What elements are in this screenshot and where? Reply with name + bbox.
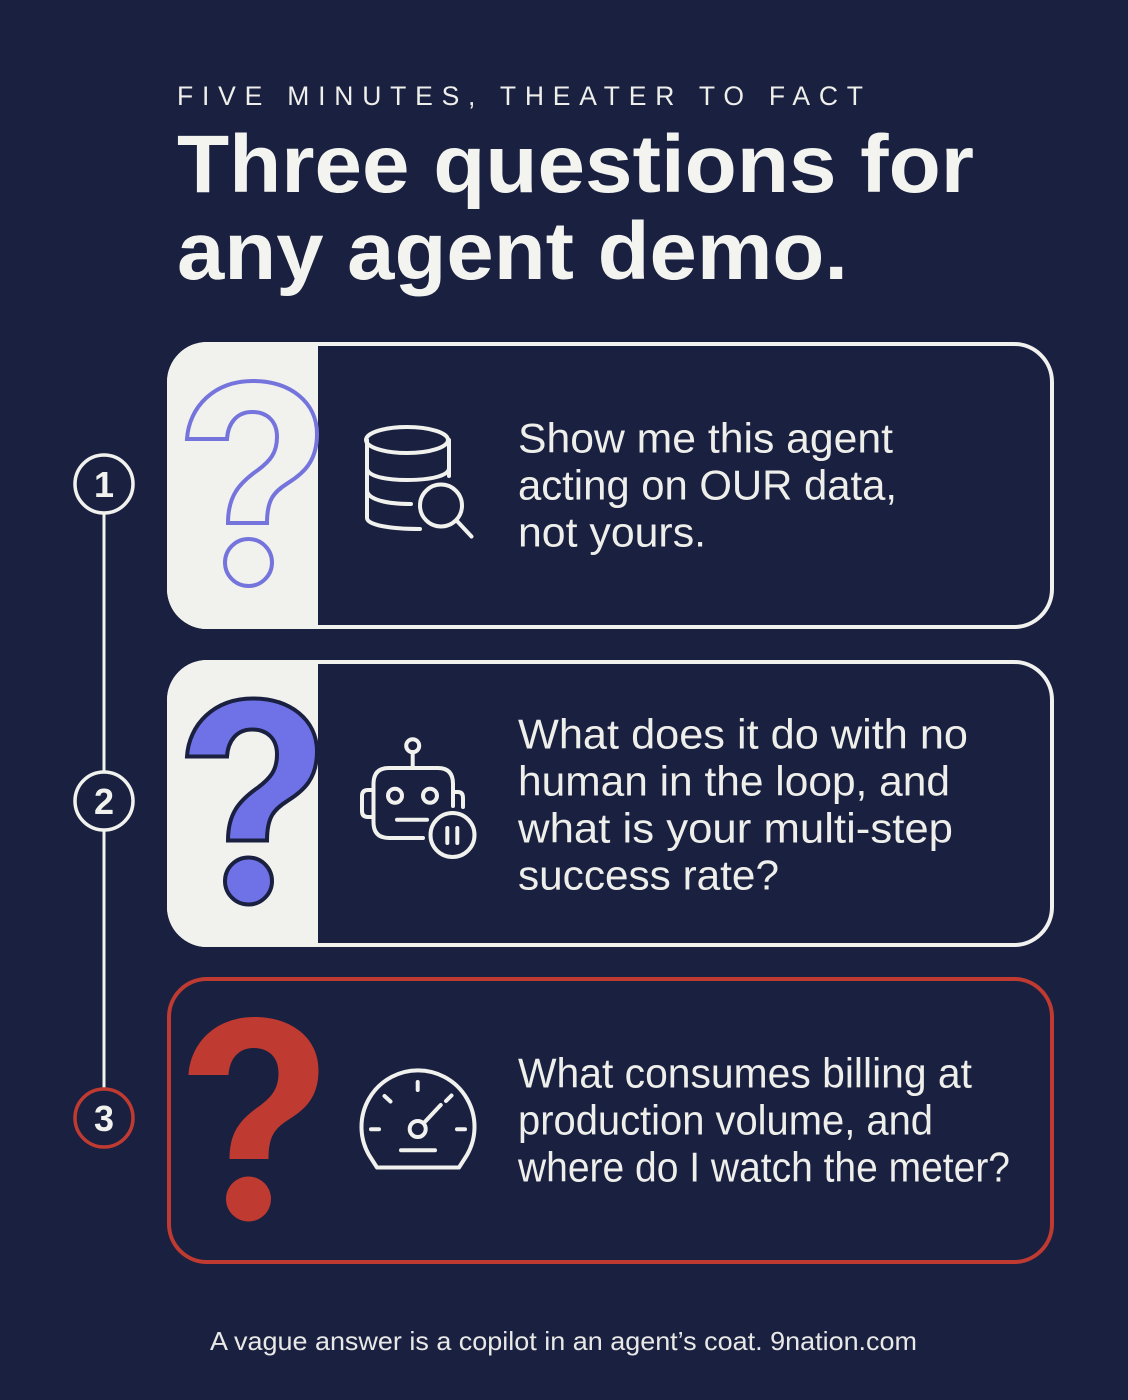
step 3 marker: 3: [94, 1098, 114, 1139]
step 2 marker: 2: [94, 781, 114, 822]
title: [177, 119, 974, 297]
title: Three questions for: [177, 119, 974, 210]
step 1 marker: [75, 455, 133, 513]
question 3 text: [517, 1050, 1010, 1190]
panel: question 3: [169, 979, 1052, 1262]
icon: gauge: [361, 1070, 474, 1168]
timeline: [75, 455, 133, 1147]
question 3 text: where do I watch the meter?: [517, 1144, 1010, 1190]
question 3 text: What consumes billing at: [518, 1050, 972, 1096]
step 3 marker: [75, 1089, 133, 1147]
question 2 text: what is your multi-step: [517, 804, 953, 852]
question 2 text: success rate?: [518, 852, 779, 898]
question 2 text: [517, 710, 968, 898]
icon: filled question mark: [187, 698, 317, 904]
panel: question 2: [167, 660, 1052, 947]
panel: question 1: [167, 342, 1052, 629]
icon: database search: [366, 427, 472, 536]
icon: red question mark: [188, 1017, 318, 1222]
question 1 text: [518, 414, 897, 556]
question 2 text: What does it do with no: [518, 710, 968, 758]
title: any agent demo.: [177, 206, 848, 297]
step 1 marker: 1: [94, 464, 114, 505]
icon: robot paused: [362, 739, 474, 857]
question 1 text: acting on OUR data,: [518, 462, 897, 508]
footer note: A vague answer is a copilot in an agent’s coat. 9nation.com: [210, 1326, 917, 1356]
question 2 text: human in the loop, and: [518, 758, 950, 804]
eyebrow: FIVE MINUTES, THEATER TO FACT: [177, 81, 863, 111]
question 3 text: production volume, and: [518, 1096, 933, 1144]
icon: outlined question mark: [187, 381, 317, 586]
question 1 text: Show me this agent: [518, 414, 893, 462]
question 1 text: not yours.: [518, 508, 706, 556]
step 2 marker: [75, 772, 133, 830]
